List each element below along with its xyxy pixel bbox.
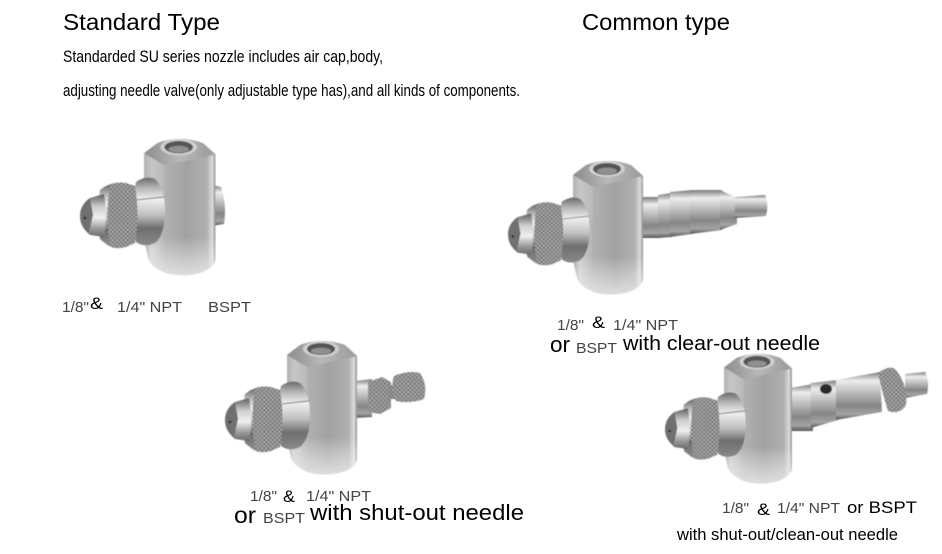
- nozzle: clear-out needle: [508, 161, 767, 294]
- label: standard type sizes: 1/4" NPT: [117, 299, 182, 316]
- title: Standard Type: Standard Type: [63, 9, 220, 35]
- label: shut-out needle: &: [283, 487, 296, 506]
- nozzle: standard type: [80, 139, 225, 275]
- label: shut-out needle: 1/4" NPT: [306, 488, 371, 505]
- label: shut-out/clean-out needle: or BSPT: [847, 498, 917, 517]
- description text: Standarded SU series nozzle includes air cap,body,: [63, 47, 383, 66]
- label: standard type sizes: [62, 294, 251, 316]
- label: clear-out needle: 1/4" NPT: [613, 317, 678, 334]
- label: shut-out/clean-out needle: with shut-out/clean-out needle: [676, 525, 898, 544]
- label: shut-out/clean-out needle: 1/4" NPT: [777, 500, 840, 517]
- label: clear-out needle: [550, 313, 820, 357]
- description text: [63, 47, 520, 100]
- label: shut-out needle: or: [234, 502, 256, 528]
- nozzle: shut-out/clean-out needle: [665, 354, 928, 483]
- label: shut-out needle: with shut-out needle: [309, 500, 524, 525]
- label: shut-out/clean-out needle: &: [757, 500, 771, 519]
- label: standard type sizes: 1/8": [62, 299, 89, 316]
- label: standard type sizes: &: [90, 294, 104, 313]
- label: clear-out needle: BSPT: [576, 340, 617, 357]
- title: Common type: Common type: [582, 9, 730, 35]
- description text: adjusting needle valve(only adjustable type has),and all kinds of components.: [63, 81, 520, 100]
- label: shut-out needle: [234, 487, 524, 528]
- label: clear-out needle: with clear-out needle: [622, 333, 820, 355]
- label: shut-out/clean-out needle: 1/8": [722, 500, 749, 517]
- label: clear-out needle: 1/8": [557, 317, 584, 334]
- label: shut-out needle: 1/8": [250, 488, 277, 505]
- nozzle: shut-out needle: [225, 341, 425, 474]
- label: standard type sizes: BSPT: [208, 299, 251, 316]
- label: shut-out/clean-out needle: [676, 498, 917, 544]
- label: clear-out needle: or: [550, 332, 570, 357]
- label: shut-out needle: BSPT: [263, 510, 305, 527]
- label: clear-out needle: &: [592, 313, 606, 332]
